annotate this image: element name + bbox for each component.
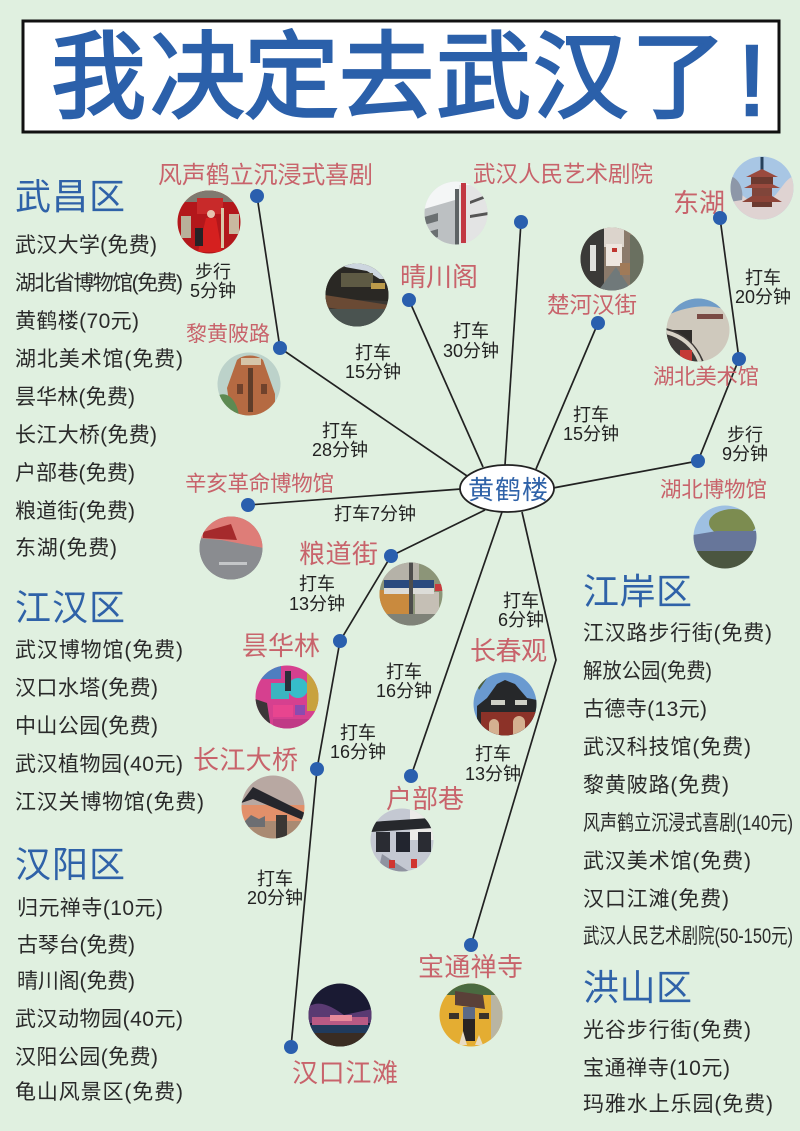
- photo: 宝通禅寺 yellow wall: [439, 983, 503, 1047]
- list rows 武昌区: [15, 234, 183, 560]
- travel time labels: 打车: [322, 421, 358, 441]
- heading: 江岸区: 江岸区: [583, 571, 692, 612]
- list rows 江岸区: 解放公园(免费): [583, 660, 712, 683]
- photo: 湖北博物馆: [693, 505, 757, 569]
- hub: 黄鹤楼: 黄鹤楼: [468, 475, 548, 505]
- label: 昙华林: 昙华林: [242, 631, 320, 661]
- travel time labels: 30分钟: [443, 341, 499, 361]
- list rows 江汉区: 汉口水塔(免费): [15, 677, 158, 700]
- travel time labels: 打车: [475, 744, 511, 764]
- travel time labels: 9分钟: [722, 444, 768, 464]
- list rows 武昌区: 武汉大学(免费): [15, 234, 157, 257]
- label: 东湖: 东湖: [673, 188, 725, 218]
- photo: 风声鹤立 stage: [177, 190, 241, 254]
- travel time labels: 步行: [195, 262, 231, 282]
- route network lines: [248, 196, 739, 1047]
- list rows 汉阳区: [15, 897, 183, 1104]
- place labels: [158, 162, 767, 1088]
- photo: 湖北美术馆: [666, 298, 730, 362]
- label: 粮道街: 粮道街: [299, 539, 378, 569]
- label: 湖北博物馆: 湖北博物馆: [660, 478, 767, 502]
- travel time labels: 28分钟: [312, 440, 368, 460]
- travel time labels: 打车7分钟: [334, 504, 416, 524]
- label: 长春观: 长春观: [470, 636, 547, 666]
- photo: 长春观 gate: [473, 672, 537, 736]
- title banner: !: [738, 25, 766, 137]
- travel time labels: [190, 262, 791, 908]
- title banner: 我决定去武汉了: [51, 25, 726, 131]
- list rows 武昌区: 湖北美术馆(免费): [15, 348, 183, 371]
- panel: 江汉区 list: [15, 587, 204, 814]
- photo: 汉口江滩 night: [308, 983, 372, 1047]
- label: 长江大桥: 长江大桥: [193, 745, 298, 775]
- hub: 黄鹤楼: [460, 465, 554, 512]
- list rows 武昌区: 长江大桥(免费): [15, 424, 157, 447]
- list rows 江岸区: 武汉美术馆(免费): [583, 850, 751, 873]
- list rows 江岸区: 古德寺(13元): [583, 698, 707, 721]
- list rows 洪山区: [583, 1019, 773, 1116]
- list rows 江岸区: 黎黄陂路(免费): [583, 774, 729, 797]
- photo: 长江大桥 sunset: [241, 775, 305, 839]
- travel time labels: 13分钟: [289, 594, 345, 614]
- list rows 江汉区: 武汉博物馆(免费): [15, 639, 183, 662]
- travel time labels: 20分钟: [735, 287, 791, 307]
- photo: 辛亥革命博物馆: [199, 516, 263, 580]
- route nodes: [241, 189, 746, 1054]
- list rows 江汉区: 武汉植物园(40元): [15, 753, 183, 776]
- list rows 武昌区: 湖北省博物馆(免费): [15, 272, 183, 295]
- list rows 江岸区: 江汉路步行街(免费): [583, 622, 772, 645]
- label: 户部巷: 户部巷: [386, 784, 464, 814]
- travel time labels: 6分钟: [498, 610, 544, 630]
- label: 宝通禅寺: 宝通禅寺: [418, 952, 523, 982]
- label: 汉口江滩: 汉口江滩: [292, 1058, 398, 1088]
- list rows 武昌区: 粮道街(免费): [15, 500, 135, 523]
- photo: 黎黄陂路 building: [217, 352, 281, 416]
- list rows 江岸区: 武汉科技馆(免费): [583, 736, 751, 759]
- panel: 江岸区 list: [583, 571, 793, 948]
- travel time labels: 打车: [745, 268, 781, 288]
- list rows 江岸区: [583, 622, 793, 948]
- travel time labels: 16分钟: [330, 742, 386, 762]
- list rows 武昌区: 东湖(免费): [15, 537, 117, 560]
- travel time labels: 打车: [453, 321, 489, 341]
- list rows 江汉区: 江汉关博物馆(免费): [15, 791, 204, 814]
- travel time labels: 16分钟: [376, 681, 432, 701]
- list rows 武昌区: 户部巷(免费): [15, 462, 135, 485]
- travel time labels: 13分钟: [465, 764, 521, 784]
- label: 晴川阁: 晴川阁: [400, 262, 478, 292]
- label: 武汉人民艺术剧院: 武汉人民艺术剧院: [473, 162, 653, 187]
- panel: 武昌区 list: [15, 176, 183, 560]
- heading: 武昌区: 武昌区: [15, 176, 125, 217]
- travel time labels: 步行: [727, 425, 763, 445]
- photo: 武汉人民艺术剧院: [424, 181, 488, 245]
- label: 风声鹤立沉浸式喜剧: 风声鹤立沉浸式喜剧: [158, 162, 373, 189]
- list rows 武昌区: 黄鹤楼(70元): [15, 310, 139, 333]
- list rows 汉阳区: 汉阳公园(免费): [15, 1046, 158, 1069]
- list rows 洪山区: 玛雅水上乐园(免费): [583, 1093, 773, 1116]
- list rows 洪山区: 宝通禅寺(10元): [583, 1057, 730, 1080]
- list rows 汉阳区: 归元禅寺(10元): [17, 897, 163, 920]
- heading: 汉阳区: 汉阳区: [15, 844, 125, 885]
- heading: 江汉区: 江汉区: [15, 587, 125, 628]
- photo: 昙华林 mural: [255, 665, 319, 729]
- panel: 汉阳区 list: [15, 844, 183, 1104]
- photo: 户部巷 lanterns: [370, 808, 434, 872]
- label: 楚河汉街: 楚河汉街: [547, 293, 637, 318]
- list rows 洪山区: 光谷步行街(免费): [583, 1019, 751, 1042]
- travel time labels: 打车: [573, 405, 609, 425]
- list rows 汉阳区: 龟山风景区(免费): [15, 1081, 183, 1104]
- travel time labels: 打车: [257, 869, 293, 889]
- photo: 东湖 pagoda: [730, 156, 794, 220]
- photo: 晴川阁: [325, 263, 389, 327]
- photo: 粮道街 street sign: [379, 562, 443, 626]
- travel time labels: 15分钟: [563, 424, 619, 444]
- list rows 汉阳区: 武汉动物园(40元): [15, 1008, 183, 1031]
- list rows 江汉区: 中山公园(免费): [15, 715, 158, 738]
- list rows 汉阳区: 古琴台(免费): [17, 934, 135, 957]
- panel: 洪山区 list: [583, 967, 773, 1116]
- photo: 楚河汉街: [580, 227, 644, 291]
- list rows 江汉区: [15, 639, 204, 814]
- label: 辛亥革命博物馆: 辛亥革命博物馆: [185, 472, 334, 496]
- list rows 江岸区: 汉口江滩(免费): [583, 888, 729, 911]
- label: 湖北美术馆: 湖北美术馆: [653, 365, 759, 389]
- list rows 武昌区: 昙华林(免费): [15, 386, 135, 409]
- travel time labels: 打车: [355, 343, 391, 363]
- label: 黎黄陂路: 黎黄陂路: [186, 323, 270, 346]
- heading: 洪山区: 洪山区: [583, 967, 692, 1008]
- travel time labels: 打车: [299, 574, 335, 594]
- travel time labels: 20分钟: [247, 888, 303, 908]
- travel time labels: 15分钟: [345, 362, 401, 382]
- travel time labels: 打车: [386, 662, 422, 682]
- travel time labels: 打车: [340, 723, 376, 743]
- list rows 汉阳区: 晴川阁(免费): [17, 970, 135, 993]
- travel time labels: 5分钟: [190, 281, 236, 301]
- travel time labels: 打车: [503, 591, 539, 611]
